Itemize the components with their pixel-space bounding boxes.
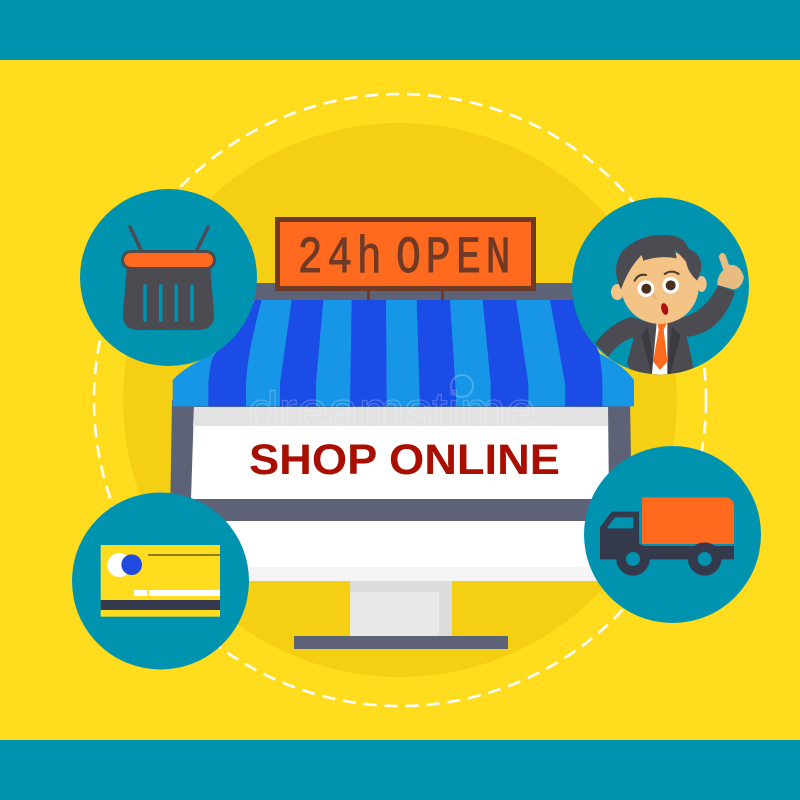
cab window	[607, 517, 633, 528]
watermark spiral	[451, 375, 473, 397]
monitor chin lower strip	[172, 567, 628, 581]
jacket	[627, 320, 693, 377]
mouth	[661, 303, 668, 315]
hand	[717, 253, 744, 289]
watermark	[248, 375, 552, 440]
card details	[101, 545, 220, 617]
icon: delivery truck	[584, 446, 761, 623]
ears	[611, 284, 624, 300]
monitor screen	[191, 407, 609, 499]
inner background circle	[123, 123, 677, 677]
businessman figure	[595, 235, 744, 377]
sign posts	[367, 290, 444, 300]
left arm	[595, 317, 650, 357]
magnetic stripe	[101, 600, 220, 610]
wheels	[616, 542, 650, 576]
card number	[134, 590, 147, 596]
person circle	[572, 198, 749, 374]
hair	[616, 235, 701, 289]
shop online heading: SHOP ONLINE	[249, 436, 560, 484]
shirt	[652, 323, 667, 377]
desktop monitor storefront	[170, 283, 632, 649]
dashed orbit ring	[94, 94, 706, 706]
card logo white	[107, 553, 131, 577]
face	[621, 249, 699, 324]
raised arm	[677, 285, 735, 337]
basket body	[123, 265, 214, 330]
sign text: 24h OPEN	[298, 230, 511, 289]
monitor frame	[170, 400, 632, 521]
truck circle	[584, 446, 761, 623]
sign board	[278, 220, 534, 288]
top teal band	[0, 0, 800, 60]
monitor top bezel	[250, 283, 578, 301]
monitor chin	[172, 521, 628, 567]
bottom teal band	[0, 740, 800, 800]
card body	[101, 545, 220, 617]
screen shadow band	[193, 407, 608, 426]
icon: credit card	[72, 492, 249, 670]
nose	[654, 293, 657, 298]
awning dark stripes	[208, 300, 602, 406]
24h open sign	[278, 220, 534, 289]
icon: shopping basket	[80, 189, 257, 366]
card logo blue	[121, 554, 142, 575]
lapels	[642, 327, 681, 375]
cargo box	[642, 497, 734, 544]
truck cab and chassis	[600, 512, 734, 559]
monitor base	[294, 636, 508, 649]
truck drawing	[600, 497, 734, 576]
icon: businessman pointing	[572, 198, 749, 377]
basket rim	[122, 252, 214, 268]
monitor stand face	[350, 592, 439, 636]
striped awning	[173, 300, 634, 406]
awning base	[173, 300, 634, 406]
basket circle	[80, 189, 257, 366]
watermark text: dreamstime.	[248, 382, 552, 440]
eyebrows	[635, 272, 679, 281]
card line	[148, 554, 220, 556]
eyes	[638, 280, 654, 297]
monitor stand	[350, 581, 452, 636]
card circle	[72, 492, 249, 670]
basket handles	[130, 227, 208, 250]
tie	[653, 323, 667, 370]
basket slats	[145, 286, 192, 320]
